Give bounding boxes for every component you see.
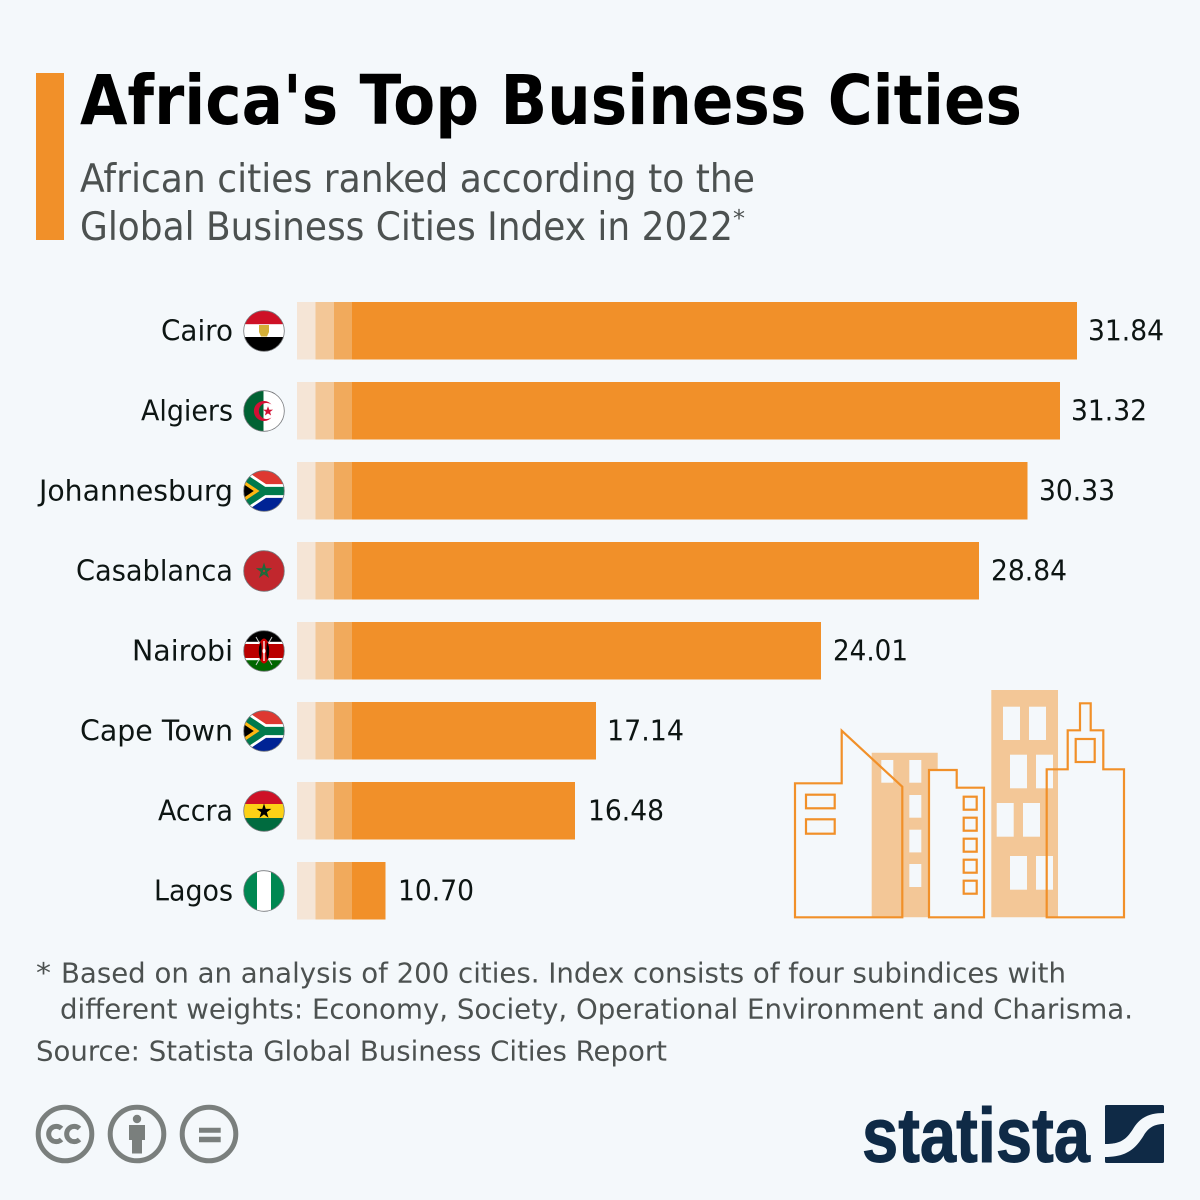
icon: flag of Nigeria bbox=[243, 870, 285, 912]
footnote: different weights: Economy, Society, Operational Environment and Charisma. bbox=[60, 992, 1133, 1026]
row: Cape Town bbox=[80, 702, 684, 760]
icon: city skyline bbox=[795, 690, 1124, 917]
row: Cairo bbox=[161, 302, 1164, 360]
subtitle bbox=[80, 157, 755, 250]
row: Accra: 16.48 bbox=[588, 795, 664, 828]
icon: attribution bbox=[110, 1107, 164, 1161]
source: Source: Statista Global Business Cities Report bbox=[36, 1034, 667, 1068]
icon: flag of South Africa bbox=[243, 470, 285, 512]
icon: no derivatives bbox=[182, 1107, 236, 1161]
row: Casablanca: 28.84 bbox=[991, 555, 1067, 588]
title: Africa's Top Business Cities bbox=[80, 61, 1022, 141]
logo mark bbox=[1105, 1105, 1164, 1163]
bar chart bbox=[37, 302, 1164, 920]
footnote: Based on an analysis of 200 cities. Index consists of four subindices with bbox=[61, 956, 1066, 990]
subtitle: * bbox=[733, 206, 745, 232]
row: Cairo: 31.84 bbox=[1088, 315, 1164, 348]
icon: flag of South Africa bbox=[243, 710, 285, 752]
row: Nairobi: Nairobi bbox=[132, 635, 233, 668]
row: Nairobi: 24.01 bbox=[833, 635, 908, 668]
row: Casablanca bbox=[76, 542, 1067, 600]
icon: flag of Algeria bbox=[243, 390, 286, 432]
row: Algiers: Algiers bbox=[141, 395, 233, 428]
row: Cairo: Cairo bbox=[161, 315, 233, 348]
row: Cape Town: 17.14 bbox=[607, 715, 684, 748]
icon: flag of Kenya bbox=[243, 630, 285, 672]
footnote bbox=[36, 956, 1133, 1026]
row: Lagos: 10.70 bbox=[398, 875, 474, 908]
row: Algiers bbox=[141, 382, 1147, 440]
subtitle: African cities ranked according to the bbox=[80, 157, 755, 202]
row: Casablanca: Casablanca bbox=[76, 555, 233, 588]
footnote: * bbox=[36, 956, 51, 990]
accent bar bbox=[36, 73, 64, 240]
row: Lagos: Lagos bbox=[154, 875, 233, 908]
row: Algiers: 31.32 bbox=[1071, 395, 1147, 428]
row: Accra bbox=[158, 782, 664, 840]
row: Johannesburg: Johannesburg bbox=[37, 475, 233, 508]
row: Accra: Accra bbox=[158, 795, 233, 828]
statista logo bbox=[862, 1093, 1164, 1179]
icon: cc bbox=[38, 1107, 92, 1161]
icon: flag of Egypt bbox=[243, 310, 285, 352]
row: Johannesburg: 30.33 bbox=[1039, 475, 1115, 508]
icon: creative commons licence bbox=[38, 1107, 236, 1161]
row: Nairobi bbox=[132, 622, 908, 680]
row: Lagos bbox=[154, 862, 474, 920]
logo wordmark: statista bbox=[862, 1093, 1091, 1179]
icon: flag of Ghana bbox=[243, 790, 285, 832]
row: Johannesburg bbox=[37, 462, 1115, 520]
row: Cape Town: Cape Town bbox=[80, 715, 233, 748]
icon: flag of Morocco bbox=[243, 550, 285, 592]
subtitle: Global Business Cities Index in 2022 bbox=[80, 205, 733, 250]
